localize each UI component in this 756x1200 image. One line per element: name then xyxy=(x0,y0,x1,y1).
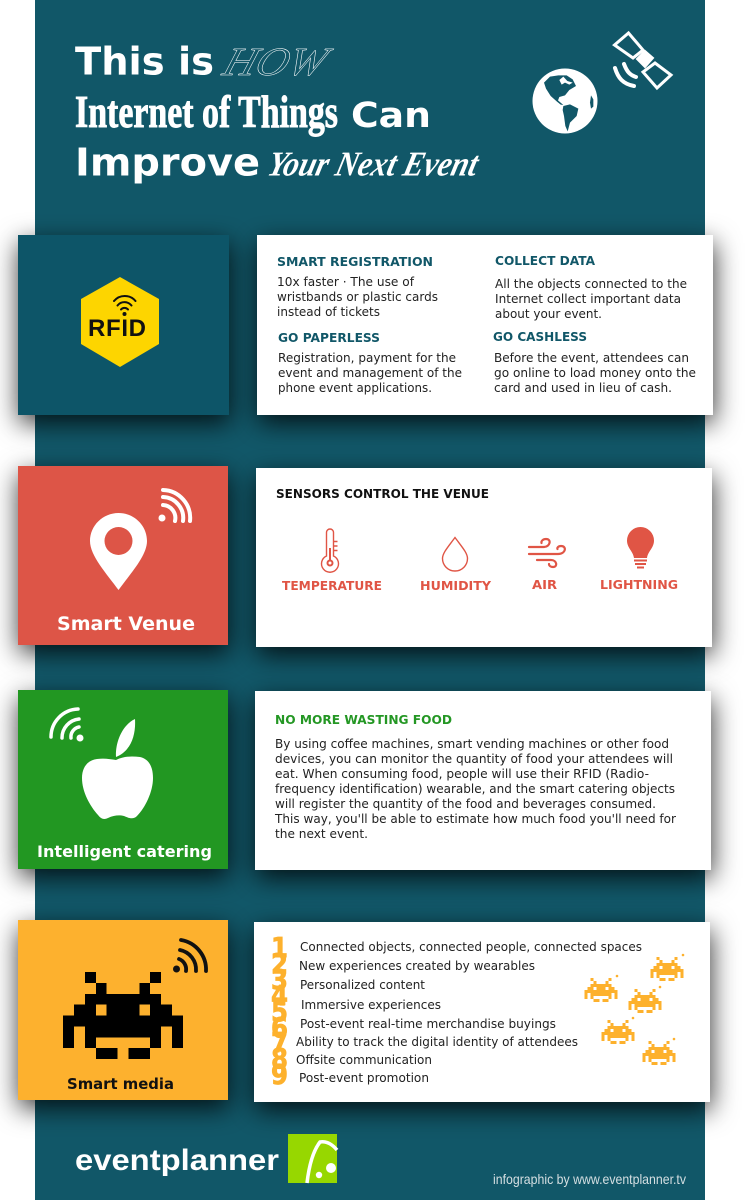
heading: sensors: SENSORS CONTROL THE VENUE xyxy=(276,486,489,501)
title: Improve xyxy=(75,140,260,184)
icon: map pin xyxy=(90,513,147,590)
text: media list: Offsite communication xyxy=(296,1052,432,1067)
text: media list: Post-event real-time merchandise buyings xyxy=(300,1016,556,1031)
text: media list: New experiences created by wearables xyxy=(299,958,535,973)
text: media list: Personalized content xyxy=(300,977,425,992)
icon: drop xyxy=(442,538,468,571)
icon: space invader xyxy=(63,972,183,1059)
icon: wifi xyxy=(158,490,190,522)
icon: satellite xyxy=(614,33,671,88)
label: intelligent catering: Intelligent catering xyxy=(37,842,212,861)
icon: RFID hexagon xyxy=(81,277,159,367)
text: go cashless: GO CASHLESS xyxy=(493,329,587,344)
numbers column xyxy=(271,931,288,1091)
icon: satellite signal xyxy=(615,64,636,86)
text: go paperless xyxy=(278,330,462,395)
icon: globe xyxy=(532,68,598,134)
icon: apple xyxy=(82,719,153,819)
text: go paperless: GO PAPERLESS xyxy=(278,330,380,345)
panel: food xyxy=(255,691,711,870)
text: go cashless: card and used in lieu of cash. xyxy=(494,380,672,395)
icons: small invaders xyxy=(584,954,684,1065)
icon: wind xyxy=(529,539,565,567)
text: food paragraph: frequency identification) wearable, and the smart catering objects xyxy=(275,781,675,796)
text: collect data: Internet collect important data xyxy=(495,291,681,306)
card: smart venue xyxy=(18,466,228,645)
text: go paperless: Registration, payment for the xyxy=(278,350,456,365)
card: RFID xyxy=(18,235,229,415)
panel: media list xyxy=(254,922,710,1102)
logo: green mark xyxy=(288,1134,337,1183)
text: go cashless xyxy=(493,329,696,395)
icon: bulb xyxy=(627,527,654,568)
numbers column: 3 xyxy=(271,963,288,996)
icon: thermometer xyxy=(322,529,339,572)
labels: sensors: HUMIDITY xyxy=(420,578,492,593)
text: collect data xyxy=(495,253,687,321)
title xyxy=(75,39,484,184)
labels: sensors xyxy=(282,577,678,593)
numbers column: 4 xyxy=(271,979,288,1012)
title: HOW xyxy=(217,39,338,84)
text: go cashless: go online to load money onto the xyxy=(494,365,696,380)
numbers column: 6 xyxy=(271,1011,288,1044)
text: food paragraph: By using coffee machines, smart vending machines or other food xyxy=(275,736,669,751)
card: smart media xyxy=(18,920,228,1100)
text: food paragraph: eat. When consuming food, people will use their RFID (Radio- xyxy=(275,766,649,781)
text: smart registration xyxy=(277,254,438,319)
text: smart registration: 10x faster · The use of xyxy=(277,274,415,289)
numbers column: 9 xyxy=(271,1058,288,1091)
panel: sensors xyxy=(256,468,712,647)
label: smart media: Smart media xyxy=(67,1075,174,1093)
labels: sensors: AIR xyxy=(532,577,557,592)
label: smart venue: Smart Venue xyxy=(57,613,195,635)
text: media list: Connected objects, connected people, connected spaces xyxy=(300,939,642,954)
numbers column: 5 xyxy=(271,995,288,1028)
text: smart registration: wristbands or plastic cards xyxy=(277,289,438,304)
text: collect data: about your event. xyxy=(495,306,602,321)
text: media list: Ability to track the digital identity of attendees xyxy=(296,1034,578,1049)
title: This is xyxy=(75,40,214,84)
numbers column: 2 xyxy=(271,947,288,980)
text: food paragraph xyxy=(274,736,677,841)
numbers column: 8 xyxy=(271,1042,288,1075)
text: food paragraph: will register the quantity of the food and beverages consumed. xyxy=(275,796,656,811)
panel: RFID text xyxy=(257,235,713,415)
heading: food: NO MORE WASTING FOOD xyxy=(275,712,452,727)
labels: sensors: LIGHTNING xyxy=(600,577,678,592)
title: Can xyxy=(351,96,431,136)
credit: infographic by www.eventplanner.tv xyxy=(493,1171,686,1187)
text: media list: Post-event promotion xyxy=(299,1070,429,1085)
numbers column: 1 xyxy=(271,931,288,964)
numbers column: 7 xyxy=(271,1026,288,1059)
text: collect data: COLLECT DATA xyxy=(495,253,595,268)
text: go paperless: event and management of the xyxy=(278,365,462,380)
logo: eventplanner wordmark: eventplanner xyxy=(75,1144,279,1177)
title: Internet of Things xyxy=(75,87,338,137)
text: collect data: All the objects connected to the xyxy=(495,276,687,291)
card: intelligent catering xyxy=(18,690,228,869)
text: media list: Immersive experiences xyxy=(301,997,441,1012)
title: Your Next Event xyxy=(264,144,484,183)
text: go paperless: phone event applications. xyxy=(278,380,432,395)
text: smart registration: instead of tickets xyxy=(277,304,380,319)
icon: wifi xyxy=(51,709,84,742)
text: go cashless: Before the event, attendees can xyxy=(494,350,689,365)
labels: sensors: TEMPERATURE xyxy=(282,578,382,593)
text: food paragraph: the next event. xyxy=(275,826,368,841)
text: food paragraph: devices, you can monitor the quantity of food your attendees will xyxy=(275,751,673,766)
text: food paragraph: This way, you'll be able to estimate how much food you'll need for xyxy=(274,811,677,826)
icon: wifi xyxy=(173,940,206,972)
text: smart registration: SMART REGISTRATION xyxy=(277,254,433,269)
text: media list xyxy=(296,939,642,1085)
icon: RFID hexagon: RFID xyxy=(88,315,146,342)
